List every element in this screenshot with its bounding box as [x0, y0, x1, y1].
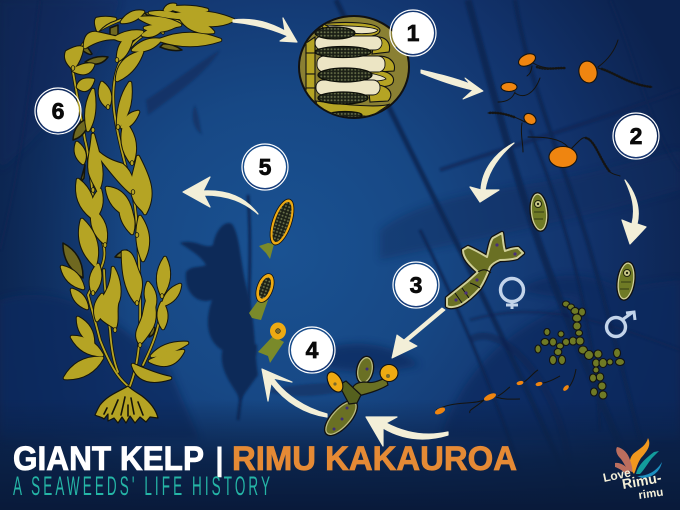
stage 5: mature sporophyte with sorus	[259, 196, 299, 259]
kelp stipes	[73, 14, 183, 386]
stage 1: sorus cross section	[299, 16, 409, 118]
stage 5: sporophyte with developing sorus	[249, 271, 278, 320]
zoospore flagella hairs	[488, 67, 652, 172]
arrow: plant to cell	[233, 18, 297, 42]
arrow: 1 to 2	[421, 70, 483, 99]
kelp holdfast	[95, 386, 158, 423]
zoospore flagella	[488, 40, 652, 176]
settled spore: left	[529, 193, 549, 231]
sorus yellow paraphysis lobes	[316, 22, 394, 116]
kelp blades	[62, 5, 233, 381]
number badge 2	[613, 113, 659, 159]
number badge 1	[390, 10, 436, 56]
number badge 3	[393, 262, 439, 308]
arrow: male gametes to egg	[366, 417, 448, 446]
logo: Love Rimu-rimu	[602, 438, 664, 502]
arrow: gametophyte to fertilisation	[392, 308, 445, 358]
stage 5: young sporophyte with orange tip	[258, 322, 286, 363]
male gametes	[434, 369, 576, 416]
sorus cream paraphyses	[315, 25, 386, 95]
male gametophyte	[535, 301, 624, 399]
arrow: spore to male	[622, 180, 646, 244]
number badge 3: 3	[410, 272, 422, 298]
number badge 4: 4	[306, 337, 319, 363]
logo wordmark: Rimu-	[621, 469, 663, 492]
number badge 4	[289, 327, 335, 373]
number badge 6	[35, 88, 81, 134]
stage 4: fertilised sporophyte on female gametophyte	[320, 356, 398, 440]
giant kelp plant	[62, 5, 233, 423]
number badge 1: 1	[407, 20, 420, 46]
arrow: sporophyte to mature kelp	[183, 177, 258, 214]
icon: female symbol	[500, 278, 524, 309]
title: RIMU KAKAUROA	[232, 440, 517, 478]
number badge 5	[242, 144, 288, 190]
logo seaweed icon	[615, 438, 662, 478]
sorus yellow stalk cells	[306, 37, 315, 108]
number badge 2: 2	[630, 123, 642, 149]
number badge 5: 5	[259, 154, 272, 180]
sorus dark sporangia	[315, 27, 372, 118]
title	[13, 440, 517, 478]
arrow: embryo to young sporophyte	[262, 369, 327, 417]
subtitle: A SEAWEEDS' LIFE HISTORY	[13, 471, 270, 501]
arrow: spore to female	[470, 143, 514, 202]
logo wordmark	[602, 465, 664, 502]
title: |	[215, 441, 224, 477]
logo wordmark: Love	[602, 465, 632, 485]
settled spore: right	[616, 262, 636, 300]
icon: male symbol	[606, 312, 635, 336]
title: GIANT KELP	[13, 440, 204, 478]
zoospore orange bodies	[501, 51, 600, 167]
kelp dark blades	[63, 12, 182, 337]
kelp bladders	[71, 58, 164, 347]
logo wordmark: rimu	[638, 487, 664, 502]
number badge 6: 6	[52, 98, 64, 124]
stage 2: zoospores	[488, 40, 652, 176]
stage 3: female gametophyte	[447, 233, 523, 307]
